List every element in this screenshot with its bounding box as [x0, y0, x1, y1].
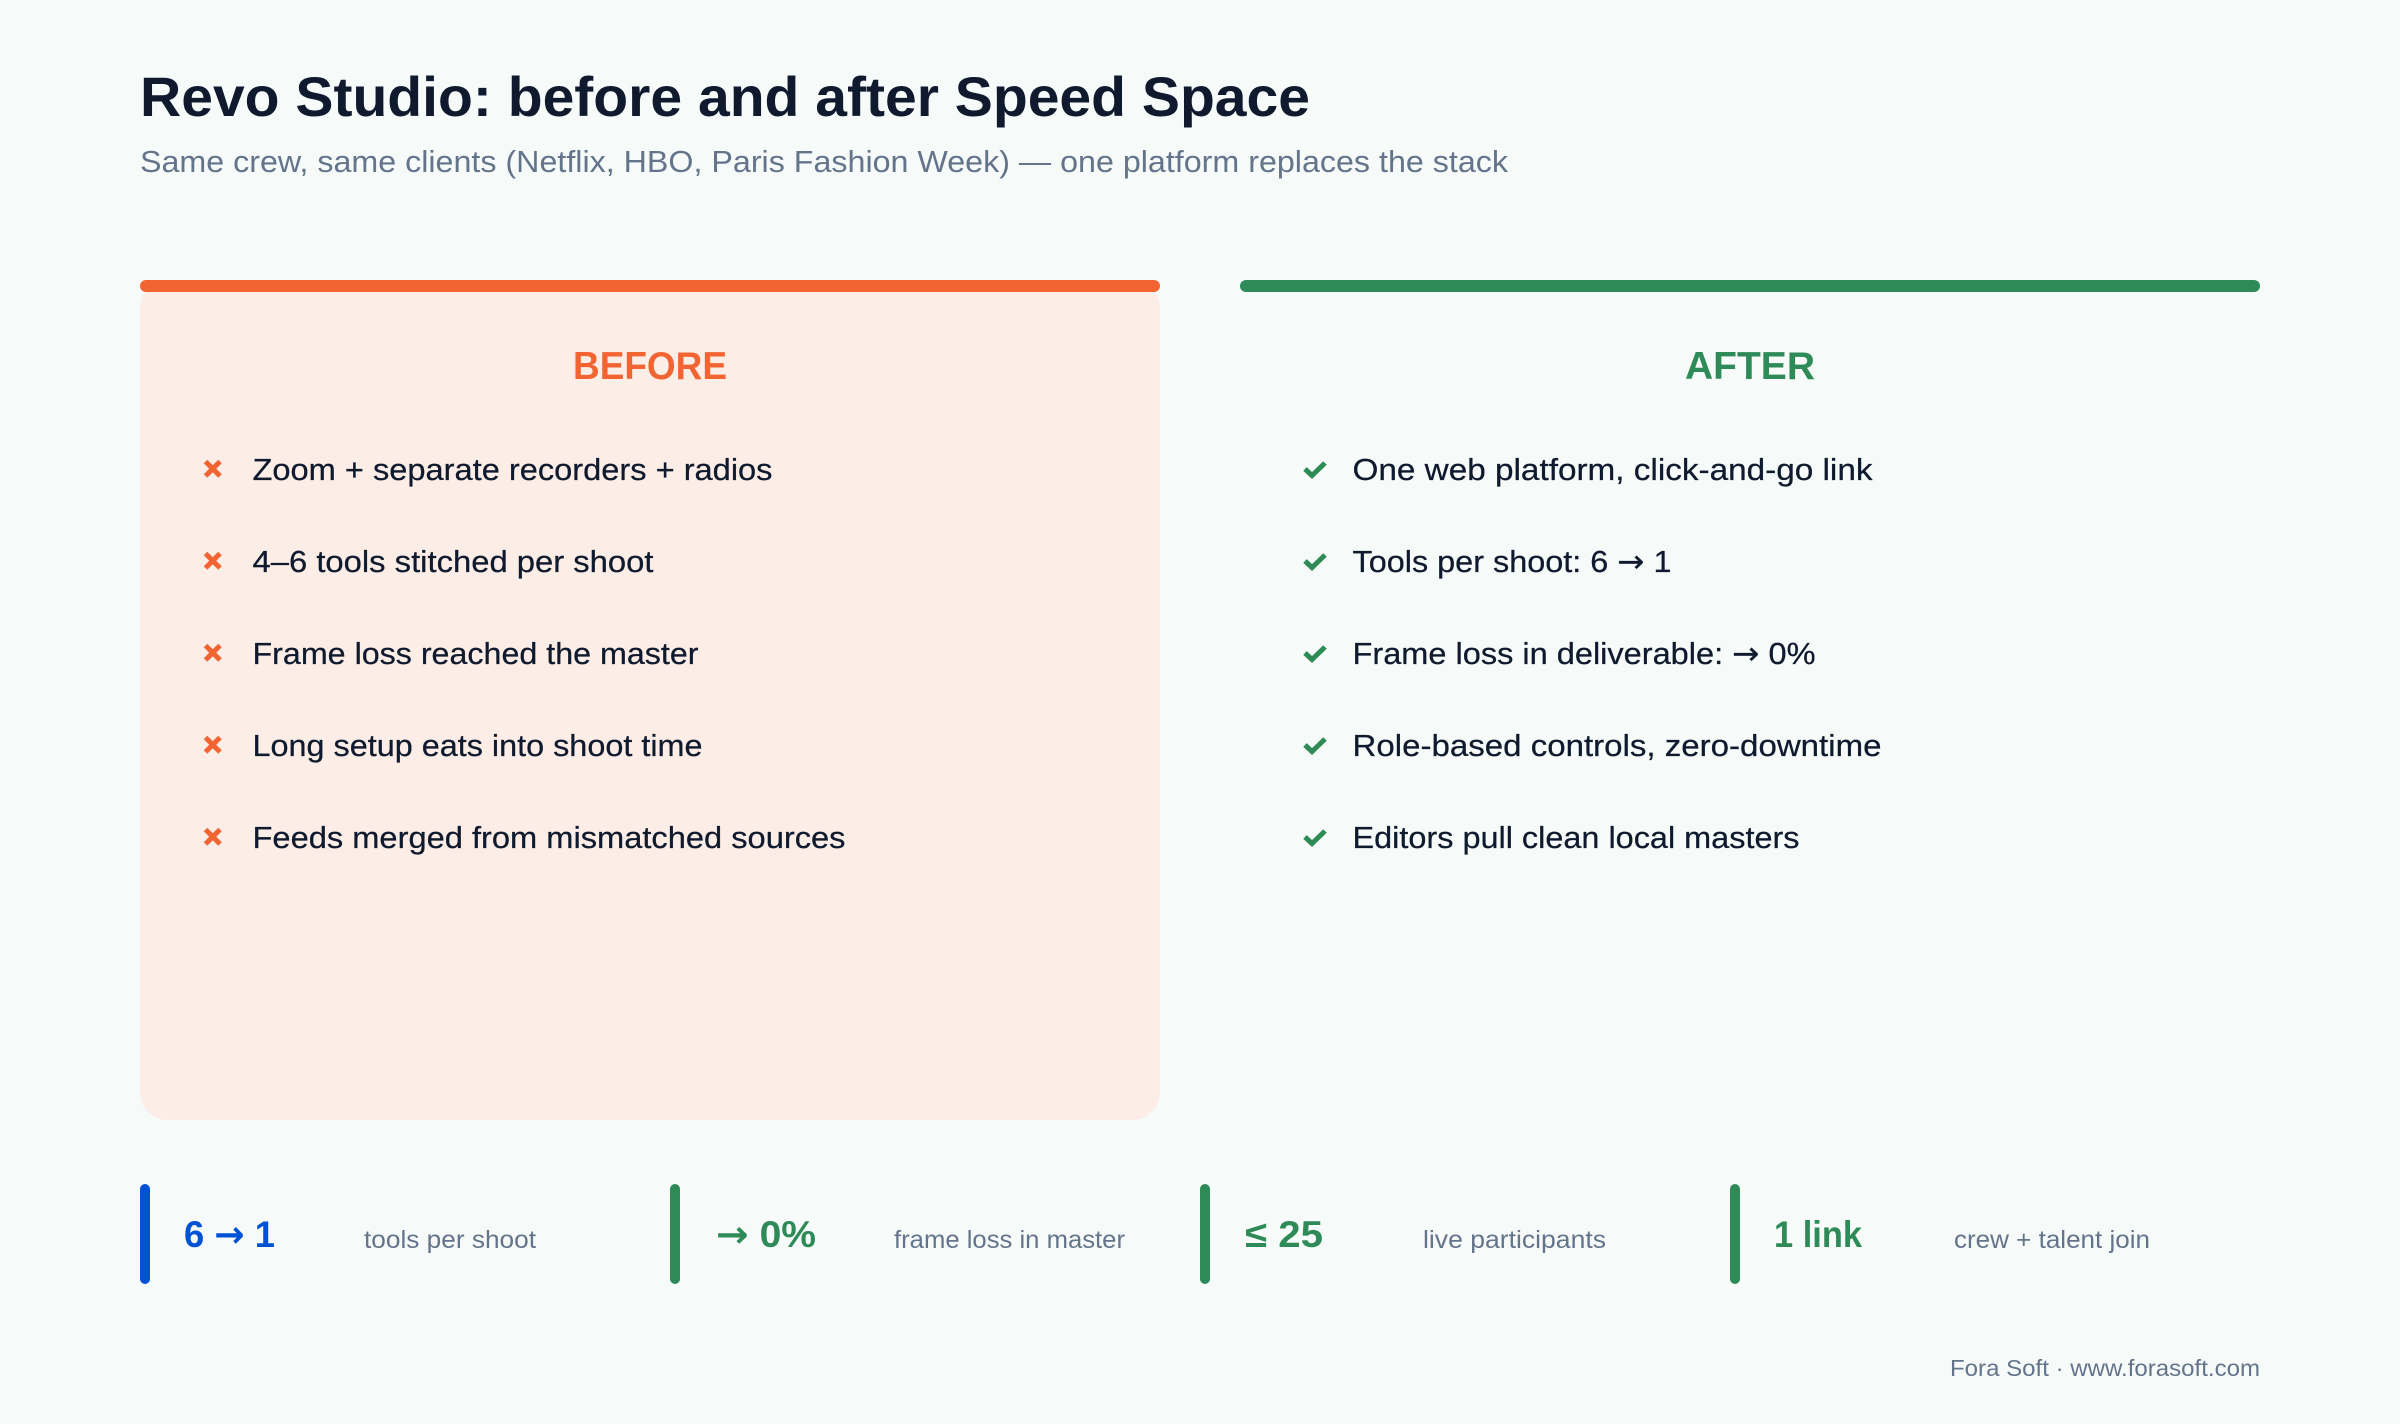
stat: one link: crew + talent join — [1954, 1226, 2150, 1254]
stat: live participants: live participants — [1423, 1226, 1606, 1254]
before item 3: Frame loss reached the master — [252, 636, 698, 671]
after item 1: One web platform, click-and-go link — [1352, 452, 1873, 487]
footer: Fora Soft · www.forasoft.com — [1950, 1355, 2260, 1381]
before panel background — [140, 280, 1160, 1120]
stat: live participants — [1200, 1184, 1606, 1284]
title: Revo Studio: before and after Speed Space — [140, 65, 1310, 128]
before item 1: Zoom + separate recorders + radios — [252, 452, 772, 487]
stat: tools per shoot: tools per shoot — [364, 1226, 536, 1254]
before item 4: Long setup eats into shoot time — [252, 728, 702, 763]
after item 3: Frame loss in deliverable: → 0% — [1352, 636, 1816, 672]
subtitle: Same crew, same clients (Netflix, HBO, Paris Fashion Week) — one platform replaces the stack — [140, 144, 1509, 179]
stat: frame loss — [670, 1184, 1125, 1284]
before heading: BEFORE — [573, 345, 727, 388]
stat: tools per shoot — [140, 1184, 536, 1284]
stat: tools per shoot: 6 → 1 — [184, 1213, 275, 1256]
before item 5: Feeds merged from mismatched sources — [252, 820, 846, 855]
stat: one link: 1 link — [1774, 1214, 1862, 1255]
after item 2: Tools per shoot: 6 → 1 — [1352, 544, 1672, 580]
after heading: AFTER — [1685, 345, 1815, 388]
after accent bar — [1240, 280, 2260, 292]
stat: frame loss: → 0% — [716, 1213, 816, 1256]
after item 5: Editors pull clean local masters — [1352, 820, 1800, 855]
panel: before — [140, 280, 1160, 1120]
panel: after — [1240, 280, 2260, 855]
stat: one link — [1730, 1184, 2150, 1284]
before item 2: 4–6 tools stitched per shoot — [252, 544, 654, 579]
stat: live participants: ≤ 25 — [1245, 1214, 1323, 1255]
after item 4: Role-based controls, zero-downtime — [1352, 728, 1882, 763]
stat: frame loss: frame loss in master — [894, 1226, 1125, 1254]
before accent bar — [140, 280, 1160, 292]
